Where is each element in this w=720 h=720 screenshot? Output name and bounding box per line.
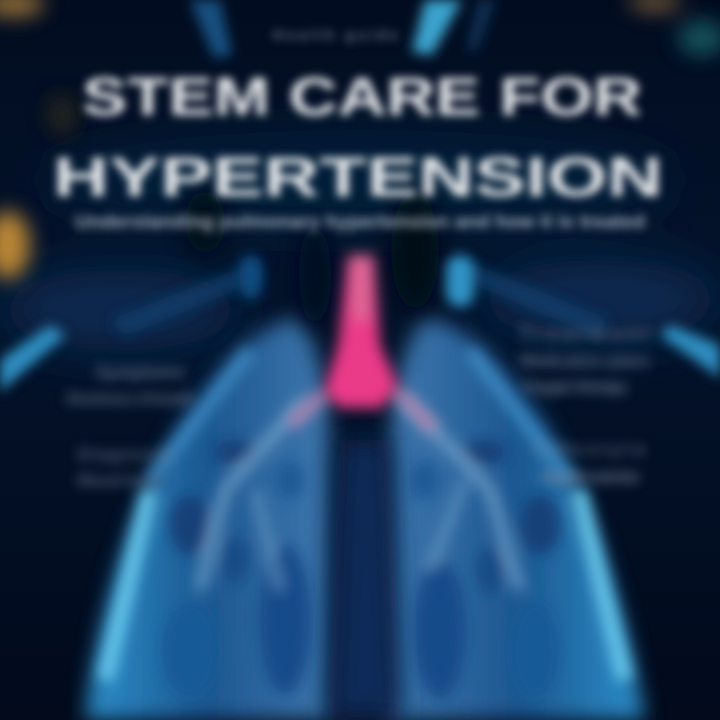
main title (53, 67, 663, 208)
pink trachea highlight (290, 255, 435, 430)
dark silhouettes behind trachea (185, 190, 439, 325)
mediastinum dark centre (328, 440, 402, 720)
left text block, blurred: Diagnosis (78, 445, 172, 464)
left lung (85, 318, 330, 720)
background glow (0, 130, 720, 350)
title subtitle: Understanding pulmonary hypertension and how it is treated (75, 212, 645, 233)
top light beams (190, 0, 496, 58)
right text block, blurred: Medication plans (520, 353, 650, 370)
right text block, blurred: Lifestyle (535, 440, 645, 459)
left text block, blurred: Symptoms (95, 362, 185, 382)
title line 1: STEM CARE FOR (82, 67, 642, 127)
small top heading: Health guide (272, 27, 398, 44)
cyan neck vessel (446, 255, 474, 307)
right lung (390, 318, 645, 720)
left text block, blurred: Blood tests (78, 473, 163, 490)
right lung inner texture (405, 350, 625, 700)
left text block, blurred (65, 362, 195, 490)
right text block, blurred: Treatment (520, 324, 650, 344)
right text block, blurred: Regular exercise (540, 469, 640, 486)
corner decorative glows (0, 0, 720, 279)
left lung inner texture (105, 350, 311, 698)
side light streaks (0, 262, 720, 392)
title line 2: HYPERTENSION (53, 145, 663, 208)
right text block, blurred (520, 324, 650, 486)
right text block, blurred: Oxygen therapy (522, 379, 628, 396)
left text block, blurred: Shortness of breath (65, 391, 195, 408)
